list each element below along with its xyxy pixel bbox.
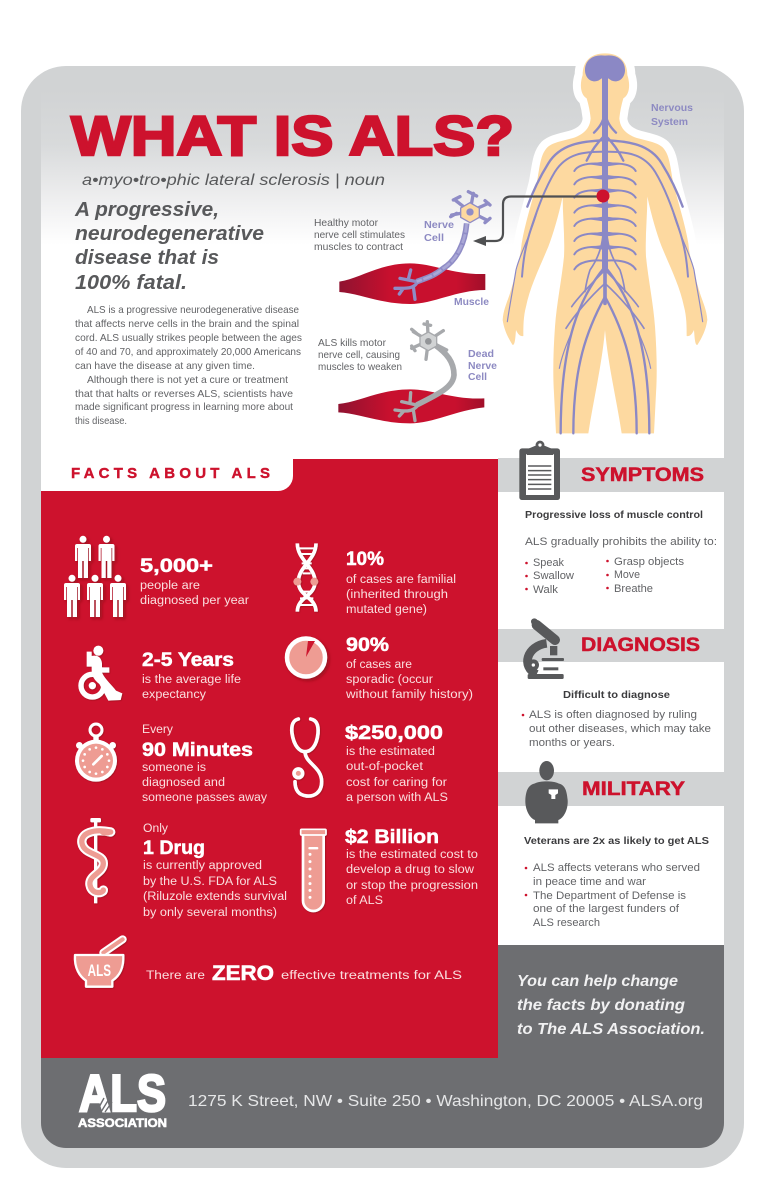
stat: every 90 minutes: 90 Minutes bbox=[142, 740, 253, 761]
diagnosis text: Difficult to diagnose bbox=[563, 689, 670, 701]
right column white background bbox=[498, 459, 724, 945]
stat: 10%: 10% bbox=[346, 549, 384, 570]
symptoms text bbox=[525, 509, 717, 596]
stat: 90% bbox=[345, 635, 473, 701]
symptoms text: Speak bbox=[533, 557, 564, 569]
label: healthy motor nerve cell caption: nerve cell stimulates bbox=[314, 229, 405, 241]
military text: Veterans are 2x as likely to get ALS bbox=[524, 835, 709, 847]
stat: 5,000+: people are bbox=[140, 580, 200, 592]
symptoms text: Swallow bbox=[533, 570, 574, 582]
stat: 90%: sporadic (occur bbox=[346, 674, 433, 686]
panel: military bbox=[498, 761, 724, 929]
label: ALS kills motor nerve cell caption: muscles to weaken bbox=[318, 361, 402, 373]
stat: 90%: 90% bbox=[346, 635, 389, 656]
label: Dead Nerve Cell bbox=[468, 348, 497, 383]
stat: 2-5 Years bbox=[142, 650, 241, 701]
stat: only 1 drug: by the U.S. FDA for ALS bbox=[143, 876, 277, 888]
label: healthy motor nerve cell caption bbox=[314, 217, 405, 253]
top panel gradient bbox=[41, 90, 724, 245]
stat: $2 billion: or stop the progression bbox=[346, 880, 478, 892]
stat: $2 billion: is the estimated cost to bbox=[346, 849, 478, 861]
stat: every 90 minutes: someone passes away bbox=[142, 792, 267, 804]
symptoms text: ALS gradually prohibits the ability to: bbox=[525, 536, 717, 548]
stat: every 90 minutes: diagnosed and bbox=[142, 777, 225, 789]
label: Nerve Cell bbox=[424, 219, 454, 244]
stat: $2 billion: of ALS bbox=[346, 895, 383, 907]
footer bbox=[41, 1058, 724, 1148]
stat: $250,000: cost for caring for bbox=[346, 777, 447, 789]
stat: 5,000+: 5,000+ bbox=[140, 556, 213, 577]
symptoms text: Progressive loss of muscle control bbox=[525, 509, 703, 521]
icon: DNA helix bbox=[293, 543, 318, 612]
stat: every 90 minutes bbox=[142, 724, 267, 804]
label: healthy motor nerve cell caption: Healthy motor bbox=[314, 217, 378, 229]
stat: $250,000: a person with ALS bbox=[346, 792, 448, 804]
stat: 10%: mutated gene) bbox=[346, 604, 427, 616]
callout: donate: to The ALS Association. bbox=[517, 1021, 705, 1038]
stat: 2-5 Years: is the average life bbox=[142, 674, 241, 686]
stat: $2 billion bbox=[345, 827, 478, 907]
logo: ALS Association: ASSOCIATION bbox=[78, 1116, 167, 1130]
callout: donate bbox=[498, 945, 724, 1058]
stat: 5,000+: diagnosed per year bbox=[140, 595, 249, 607]
stat: 5,000+ bbox=[140, 556, 249, 607]
stat: zero effective treatments: ZERO bbox=[212, 962, 274, 985]
military text: ALS affects veterans who served bbox=[533, 862, 700, 874]
tagline bbox=[74, 199, 264, 294]
tagline: A progressive, bbox=[74, 199, 219, 221]
icon: mortar and pestle: ALS bbox=[88, 961, 111, 980]
stat: 90%: of cases are bbox=[346, 659, 412, 671]
icon: soldier silhouette bbox=[525, 761, 568, 823]
label: Dead Nerve Cell: Nerve bbox=[468, 360, 497, 372]
military text: one of the largest funders of bbox=[533, 903, 680, 915]
stat: 10%: of cases are familial bbox=[346, 574, 456, 586]
label: Dead Nerve Cell: Cell bbox=[468, 371, 487, 383]
icon: stethoscope bbox=[292, 719, 322, 796]
intro paragraph: made significant progress in learning more about bbox=[75, 402, 293, 413]
intro paragraph: that that halts or reverses ALS, scientists have bbox=[75, 389, 293, 400]
stat: $2 billion: develop a drug to slow bbox=[346, 864, 475, 876]
stat: only 1 drug bbox=[143, 823, 287, 919]
panel: diagnosis bbox=[498, 622, 724, 749]
label: Dead Nerve Cell: Dead bbox=[468, 348, 494, 360]
tagline: disease that is bbox=[75, 247, 219, 269]
tagline: neurodegenerative bbox=[75, 223, 264, 245]
panel: facts about ALS bbox=[41, 459, 498, 1058]
stat: only 1 drug: Only bbox=[143, 823, 168, 835]
heading: facts about ALS: FACTS ABOUT ALS bbox=[71, 465, 270, 482]
connector arrow from spine to nerve cell bbox=[473, 190, 610, 246]
symptoms text: Move bbox=[614, 569, 640, 581]
stat: 10%: (inherited through bbox=[346, 589, 448, 601]
stat: every 90 minutes: someone is bbox=[142, 762, 206, 774]
stat: 2-5 Years: 2-5 Years bbox=[142, 650, 234, 671]
diagnosis text: ALS is often diagnosed by ruling bbox=[529, 709, 697, 721]
intro paragraph: ALS is a progressive neurodegenerative disease bbox=[87, 305, 299, 316]
tagline: 100% fatal. bbox=[75, 272, 187, 294]
intro paragraph: can have the disease at any given time. bbox=[75, 361, 255, 372]
stat: $250,000: $250,000 bbox=[345, 723, 443, 744]
stat: zero effective treatments: There are bbox=[146, 970, 205, 982]
label: ALS kills motor nerve cell caption: nerve cell, causing bbox=[318, 349, 400, 361]
icon: clipboard bbox=[519, 441, 560, 500]
symptoms text: Grasp objects bbox=[614, 556, 685, 568]
stat: 90%: without family history) bbox=[345, 689, 473, 701]
military text: ALS research bbox=[533, 917, 600, 929]
illustration: dead nerve cell and muscle bbox=[338, 322, 484, 423]
stat: every 90 minutes: Every bbox=[142, 724, 173, 736]
intro paragraph: this disease. bbox=[75, 416, 127, 427]
intro paragraph: cord. ALS usually strikes people between the ages bbox=[75, 333, 302, 344]
intro paragraph: of 40 and 70, and approximately 20,000 Americans bbox=[75, 347, 301, 358]
icon: stopwatch bbox=[75, 724, 117, 782]
label: Nervous System: System bbox=[651, 116, 688, 128]
callout: donate: You can help change bbox=[517, 973, 678, 990]
stat: 10% bbox=[346, 549, 456, 616]
stat: only 1 drug: (Riluzole extends survival bbox=[143, 891, 287, 903]
panel: symptoms bbox=[498, 441, 724, 596]
stat: zero effective treatments: effective treatments for ALS bbox=[281, 970, 462, 982]
icon: test tube bbox=[301, 829, 326, 911]
icon: microscope bbox=[528, 622, 564, 679]
label: Nervous System: Nervous bbox=[651, 102, 693, 114]
military text bbox=[524, 835, 709, 929]
stat: zero effective treatments bbox=[146, 962, 462, 985]
symptoms text: Walk bbox=[533, 584, 559, 596]
pronunciation: a•myo•tro•phic lateral sclerosis | noun bbox=[82, 172, 385, 189]
military text: The Department of Defense is bbox=[533, 890, 687, 902]
icon: pie chart 90% bbox=[287, 638, 325, 676]
stat: 2-5 Years: expectancy bbox=[142, 689, 206, 701]
stat: $2 billion: $2 Billion bbox=[345, 827, 439, 848]
title: WHAT IS ALS? bbox=[71, 104, 514, 167]
label: Muscle: Muscle bbox=[454, 296, 489, 308]
logo: ALS Association: ALS bbox=[79, 1065, 166, 1123]
icon: rod of Asclepius bbox=[82, 818, 112, 903]
intro paragraph: Although there is not yet a cure or treatment bbox=[87, 375, 288, 386]
heading: symptoms: SYMPTOMS bbox=[581, 465, 704, 486]
callout: donate: the facts by donating bbox=[517, 997, 686, 1014]
label: Nerve Cell: Nerve bbox=[424, 219, 454, 231]
stat: $250,000: out-of-pocket bbox=[346, 761, 424, 773]
icon: mortar and pestle bbox=[75, 939, 123, 987]
icon: people bbox=[64, 536, 126, 617]
address: 1275 K Street, NW • Suite 250 • Washington, DC 20005 • ALSA.org bbox=[188, 1093, 703, 1110]
label: healthy motor nerve cell caption: muscles to contract bbox=[314, 241, 403, 253]
diagnosis text bbox=[522, 689, 711, 749]
label: ALS kills motor nerve cell caption: ALS kills motor bbox=[318, 337, 386, 349]
symptoms text: Breathe bbox=[614, 583, 653, 595]
illustration: healthy nerve cell and muscle bbox=[339, 192, 490, 304]
label: ALS kills motor nerve cell caption bbox=[318, 337, 402, 373]
icon: wheelchair bbox=[81, 646, 122, 701]
heading: diagnosis: DIAGNOSIS bbox=[581, 635, 700, 656]
stat: only 1 drug: is currently approved bbox=[143, 860, 262, 872]
stat: only 1 drug: by only several months) bbox=[143, 907, 277, 919]
intro paragraph bbox=[75, 305, 302, 427]
military text: in peace time and war bbox=[533, 876, 646, 888]
diagnosis text: out other diseases, which may take bbox=[529, 723, 711, 735]
heading: military: MILITARY bbox=[582, 779, 685, 800]
stat: only 1 drug: 1 Drug bbox=[143, 838, 205, 859]
illustration: human body with nervous system bbox=[503, 53, 707, 433]
stat: $250,000: is the estimated bbox=[346, 746, 435, 758]
intro paragraph: that affects nerve cells in the brain and the spinal bbox=[75, 319, 299, 330]
diagnosis text: months or years. bbox=[529, 737, 615, 749]
stat: $250,000 bbox=[345, 723, 448, 804]
label: Nervous System bbox=[651, 102, 693, 128]
label: Nerve Cell: Cell bbox=[424, 232, 444, 244]
